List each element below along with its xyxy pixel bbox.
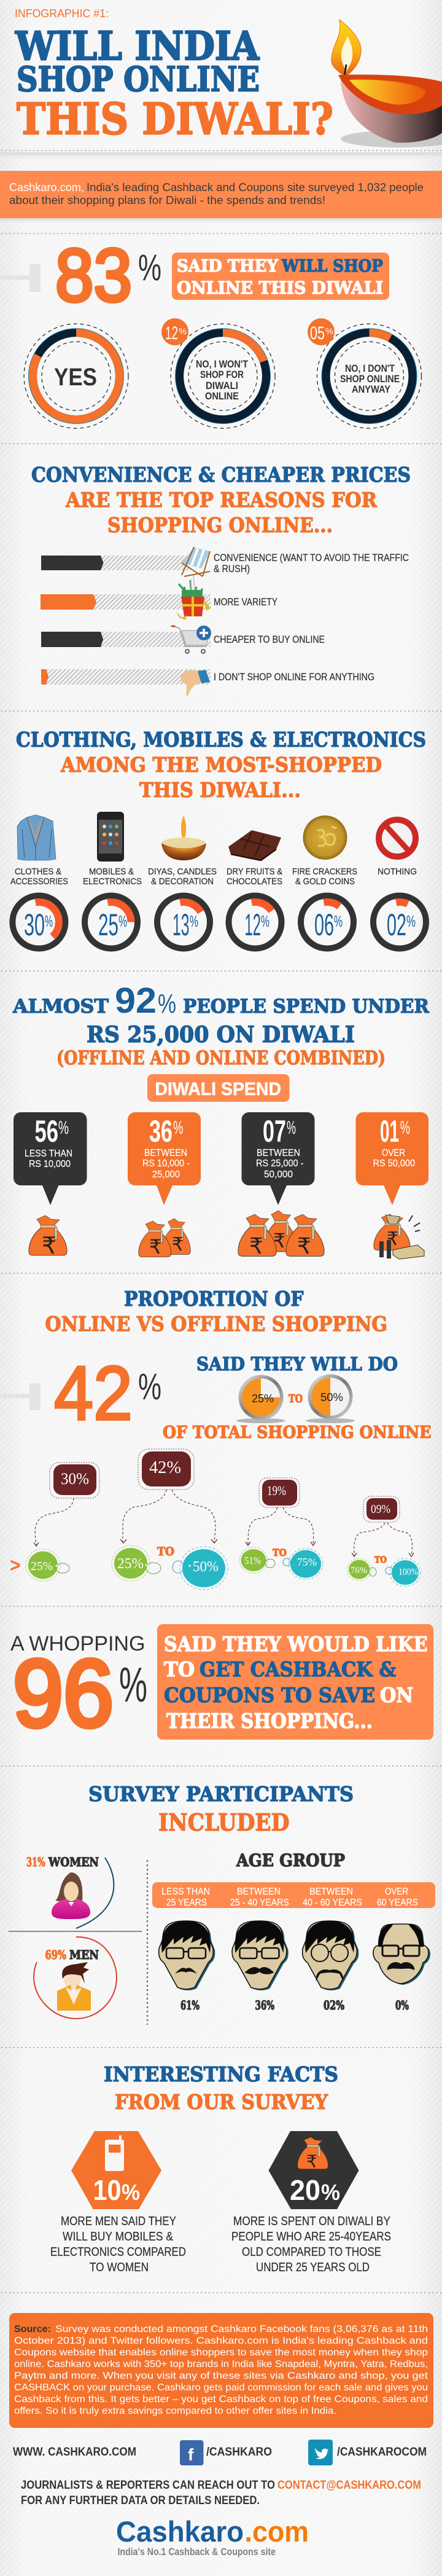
icon: diya lamp — [332, 20, 442, 147]
fact: 10 percent: ELECTRONICS COMPARED — [50, 2245, 186, 2259]
divider: gender — [9, 1931, 142, 1932]
face: under 25 61 percent: 61% — [180, 1998, 200, 2012]
icon: thumbs down — [180, 670, 210, 696]
decorative hatch marker — [0, 264, 41, 292]
icon: two money bags: ₹ — [172, 1235, 184, 1255]
panel: intro band: India's leading Cashback and Coupons site surveyed 1,032 people — [87, 181, 424, 194]
footer: facebook: f — [188, 2445, 194, 2464]
category: mobiles — [83, 812, 142, 949]
bubble: 07 percent: % — [287, 1118, 296, 1138]
bubble: 56 percent — [14, 1112, 87, 1205]
callout: will shop online: SAID THEY — [177, 257, 279, 276]
fact: 20 percent — [231, 2131, 391, 2274]
footer: logo: Cashkaro — [116, 2515, 244, 2548]
icon: one money bag: ₹ — [42, 1233, 56, 1259]
category: diyas: DIYAS, CANDLES — [148, 866, 217, 877]
ring: no, won't shop 12 percent: NO, I WON'T — [196, 358, 249, 370]
category: nothing: NOTHING — [378, 866, 417, 877]
category: nothing: 02 — [387, 908, 406, 942]
bubble: 36 percent: 36 — [149, 1114, 173, 1149]
text: of total shopping online: OF TOTAL SHOPPING ONLINE — [163, 1423, 431, 1442]
stat: 42 percent: % — [138, 1366, 161, 1407]
face: 40-60 02 percent — [303, 1921, 359, 2012]
heading: interesting facts: INTERESTING FACTS — [104, 2062, 338, 2086]
group: 09 percent: TO — [374, 1555, 387, 1565]
category: nothing: % — [406, 912, 416, 930]
bar: convenience — [41, 547, 409, 576]
heading: survey participants: INCLUDED — [158, 1808, 290, 1836]
bubble: 07 percent: 50,000 — [264, 1169, 293, 1180]
stat: whopping 96 percent: A WHOPPING — [10, 1632, 145, 1655]
ring: no, won't shop 12 percent — [161, 318, 275, 428]
icon: candle diya — [161, 815, 206, 860]
label: diwali spend — [147, 1074, 290, 1102]
panel: source: online. Cashkaro works with 350+ top brands in India like Snapdeal, Myntra, Yatra, Redbus, — [14, 2359, 428, 2370]
category: fire crackers — [292, 815, 357, 949]
bar: no online shopping: I DON'T SHOP ONLINE FOR ANYTHING — [214, 671, 374, 683]
category: mobiles: MOBILES & — [89, 866, 134, 877]
panel: intro band: Cashkaro.com, — [9, 181, 84, 194]
fact: 20 percent: MORE IS SPENT ON DIWALI BY — [233, 2215, 390, 2228]
bubble: 01 percent: OVER — [382, 1148, 405, 1158]
category: mobiles: % — [118, 912, 127, 930]
heading: age group: AGE GROUP — [236, 1850, 345, 1871]
bar: cheaper: CHEAPER TO BUY ONLINE — [214, 634, 325, 645]
bar: more variety — [41, 575, 277, 620]
bubble: 36 percent: BETWEEN — [144, 1148, 187, 1158]
category: nothing — [373, 820, 426, 949]
bubble: 01 percent — [356, 1112, 428, 1205]
main title: WILL INDIA — [15, 23, 260, 69]
icon: chocolate bar — [228, 830, 281, 860]
icon: one money bag — [29, 1215, 67, 1259]
ring: no, don't shop online 05 percent: SHOP ONLINE — [340, 373, 400, 385]
bar: cheaper — [41, 626, 325, 653]
panel: source: offers. So it is truly extra savings compared to other offer sites in India. — [14, 2406, 336, 2416]
heading: survey participants — [88, 1782, 354, 1836]
heading: online vs offline: ONLINE VS OFFLINE SHOPPING — [45, 1312, 387, 1336]
category: clothes — [10, 815, 68, 949]
ring: no, won't shop 12 percent: ONLINE — [205, 390, 239, 402]
callout: will shop online: ONLINE THIS DIWALI — [177, 278, 383, 298]
panel: age headers: OVER — [385, 1887, 408, 1897]
panel: men 69 percent — [34, 1937, 117, 2019]
gauge: 25 percent: 25% — [252, 1392, 274, 1405]
panel: women 31 percent: WOMEN — [48, 1855, 99, 1869]
text: said they will do: SAID THEY WILL DO — [196, 1354, 398, 1375]
ring: no, don't shop online 05 percent: 05 — [310, 323, 325, 344]
category: clothes: % — [45, 912, 53, 930]
main title — [15, 23, 333, 144]
footer: logo — [116, 2515, 309, 2558]
icon: three money bags — [238, 1211, 324, 1259]
footer: facebook — [180, 2440, 272, 2465]
callout: will shop online: WILL SHOP — [281, 257, 383, 276]
category: clothes: 30 — [24, 908, 45, 942]
category: dry fruits — [227, 830, 282, 949]
stat: 42 percent: 42 — [54, 1351, 133, 1436]
bubble: 07 percent: BETWEEN — [257, 1148, 300, 1158]
panel: women 31 percent — [26, 1855, 114, 1928]
ring: no, don't shop online 05 percent: ANYWAY — [352, 383, 391, 395]
main title: THIS DIWALI? — [17, 93, 333, 144]
bar: convenience: CONVENIENCE (WANT TO AVOID THE TRAFFIC — [214, 552, 409, 564]
heading: 92 percent spend: PEOPLE SPEND UNDER — [183, 995, 429, 1018]
ring: no, don't shop online 05 percent: % — [325, 326, 333, 337]
icon: three money bags: ₹ — [249, 1233, 263, 1259]
heading: 92 percent spend: ALMOST — [12, 995, 109, 1018]
icon: gift basket of crackers — [176, 575, 211, 620]
icon: money bag with cash — [374, 1214, 424, 1259]
footer: journalists contact: JOURNALISTS & REPORTERS CAN REACH OUT TO — [21, 2479, 275, 2492]
fact: 10 percent: MORE MEN SAID THEY — [61, 2215, 176, 2228]
panel: women 31 percent: 31% — [26, 1855, 45, 1869]
ring: no, won't shop 12 percent: DIWALI — [206, 380, 238, 391]
icon: prohibited sign — [379, 820, 416, 857]
group: 09 percent: 76% — [351, 1566, 367, 1576]
fact: 20 percent: PEOPLE WHO ARE 25-40YEARS — [231, 2230, 391, 2244]
category: mobiles: ELECTRONICS — [83, 876, 142, 887]
group: 30 percent to over 25: 30% — [61, 1470, 89, 1488]
heading: interesting facts: FROM OUR SURVEY — [115, 2090, 328, 2114]
group: 19 percent: 51% — [244, 1555, 261, 1566]
heading: online vs offline — [45, 1287, 387, 1336]
stat: 83 percent: 83 — [55, 234, 132, 317]
gauge: 25 percent — [236, 1375, 285, 1423]
category: fire crackers: & GOLD COINS — [295, 876, 355, 887]
icon: two money bags — [139, 1219, 190, 1258]
panel: source: Paytm and more. When you visit any of these sites via Cashkaro and shop, you get — [14, 2371, 428, 2381]
panel: age headers: 25 YEARS — [166, 1898, 207, 1908]
heading: most shopped: AMONG THE MOST-SHOPPED — [60, 753, 382, 777]
bubble: 07 percent: 07 — [263, 1114, 286, 1149]
fact: 10 percent: TO WOMEN — [90, 2261, 149, 2274]
footer: journalists contact: FOR ANY FURTHER DATA OR DETAILS NEEDED. — [21, 2494, 260, 2507]
panel: intro band: about their shopping plans for Diwali - the spends and trends! — [9, 194, 325, 206]
connectors: dashed arrows — [35, 1490, 412, 1556]
bubble: 01 percent: RS 50,000 — [373, 1158, 415, 1169]
panel: men 69 percent: 69% — [45, 1947, 66, 1962]
panel: age headers: 60 YEARS — [377, 1898, 418, 1908]
panel: age headers: 40 - 60 YEARS — [303, 1898, 362, 1908]
category: diyas: & DECORATION — [151, 876, 214, 887]
icon: shopping cart — [171, 626, 211, 653]
panel: age headers: 25 - 40 YEARS — [230, 1898, 289, 1908]
bar: more variety: MORE VARIETY — [214, 596, 277, 608]
heading: interesting facts — [104, 2062, 338, 2114]
gauge: 50 percent — [306, 1374, 355, 1423]
heading: top reasons: ARE THE TOP REASONS FOR — [65, 488, 378, 512]
group: 42 percent: 50% — [193, 1559, 219, 1575]
callout: cashback and coupons: THEIR SHOPPING... — [166, 1709, 373, 1733]
panel: men 69 percent: MEN — [69, 1947, 99, 1962]
footer: logo: .com — [244, 2515, 309, 2548]
category: fire crackers: % — [334, 912, 343, 930]
stat: 83 percent: % — [138, 247, 161, 288]
footer: twitter — [308, 2440, 427, 2465]
heading: top reasons: CONVENIENCE & CHEAPER PRICES — [31, 463, 411, 487]
category: dry fruits: CHOCOLATES — [227, 876, 282, 887]
panel: source: Source: — [14, 2324, 51, 2334]
face: over 60 0 percent — [373, 1924, 430, 2012]
panel: source: Cashback from this. It gets better – you get Cashback on top of free Coupons, sales and — [14, 2394, 428, 2405]
fact: 20 percent: % — [321, 2180, 340, 2205]
bubble: 36 percent: % — [173, 1118, 183, 1138]
icon: three money bags: ₹ — [297, 1233, 311, 1259]
heading: 92 percent spend — [12, 981, 429, 1069]
icon: mobile phone — [105, 2135, 124, 2171]
ring: no, don't shop online 05 percent — [308, 318, 421, 428]
group: 30 percent to over 25 — [10, 1463, 99, 1581]
callout: cashback and coupons: ON — [380, 1683, 413, 1707]
heading: 92 percent spend: RS 25,000 ON DIWALI — [87, 1022, 355, 1048]
text: to: TO — [289, 1392, 303, 1405]
heading: most shopped — [16, 728, 426, 802]
bubble: 36 percent — [128, 1112, 201, 1205]
heading: most shopped: THIS DIWALI... — [139, 778, 301, 802]
group: 19 percent: 75% — [297, 1556, 317, 1568]
icon: money bag — [298, 2137, 328, 2171]
bubble: 36 percent: RS 10,000 - — [142, 1158, 190, 1169]
ring: no, don't shop online 05 percent: NO, I DON'T — [345, 363, 395, 374]
panel: source — [9, 2313, 433, 2428]
group: 19 percent: TO — [273, 1547, 287, 1558]
group: 19 percent — [239, 1478, 323, 1579]
category: clothes: ACCESSORIES — [10, 876, 68, 887]
bubble: 36 percent: 25,000 — [152, 1169, 180, 1180]
category: mobiles: 25 — [98, 908, 118, 942]
group: 42 percent: 42% — [149, 1458, 181, 1477]
header: infographic label: INFOGRAPHIC #1: — [15, 7, 109, 20]
face: 25-40 36 percent — [232, 1921, 289, 2012]
face: 25-40 36 percent: 36% — [255, 1998, 274, 2012]
icon: two money bags: ₹ — [149, 1236, 161, 1258]
bubble: 01 percent: 01 — [380, 1114, 399, 1149]
panel: source: CASHBACK on your purchase. Cashkaro gets paid commission for each sale and gives you — [14, 2382, 428, 2393]
bar: convenience: & RUSH) — [214, 563, 250, 575]
bar: no online shopping — [41, 669, 374, 696]
category: clothes: CLOTHES & — [15, 866, 61, 877]
icon: gold coin — [303, 815, 347, 860]
group: 19 percent: 19% — [267, 1483, 286, 1498]
ring: no, won't shop 12 percent: 12 — [165, 323, 178, 344]
category: diyas: % — [190, 912, 198, 930]
main title: SHOP ONLINE — [17, 59, 260, 99]
heading: 92 percent spend: % — [158, 989, 176, 1019]
panel: source: Coupons website that enables online shoppers to save the most money when they shop — [14, 2347, 428, 2358]
fact: 10 percent — [50, 2131, 186, 2274]
face: over 60 0 percent: 0% — [395, 1998, 409, 2012]
panel: intro band — [0, 171, 442, 218]
fact: 10 percent: % — [122, 2180, 140, 2205]
icon: man — [57, 1962, 91, 2011]
heading: online vs offline: PROPORTION OF — [124, 1287, 303, 1311]
group: 09 percent: 100% — [398, 1567, 418, 1577]
fact: 20 percent: OLD COMPARED TO THOSE — [242, 2245, 381, 2259]
heading: 92 percent spend: 92 — [115, 981, 157, 1021]
fact: 10 percent: 10 — [93, 2174, 122, 2206]
panel: source: Survey was conducted amongst Cashkaro Facebook fans (3,06,376 as at 11th — [55, 2324, 428, 2334]
heading: top reasons: SHOPPING ONLINE... — [107, 513, 333, 537]
panel: age headers: LESS THAN — [161, 1887, 210, 1897]
heading: survey participants: SURVEY PARTICIPANTS — [88, 1782, 354, 1806]
callout: cashback and coupons: TO — [164, 1657, 195, 1681]
stat: whopping 96 percent: 96 — [13, 1640, 114, 1746]
callout: cashback and coupons: GET CASHBACK & — [200, 1657, 396, 1681]
bubble: 56 percent: % — [58, 1118, 69, 1138]
heading: top reasons — [31, 463, 411, 537]
divider: vertical dotted — [147, 1860, 148, 2025]
footer: website: WWW. CASHKARO.COM — [13, 2446, 136, 2459]
panel: age headers: BETWEEN — [309, 1887, 353, 1897]
bubble: 56 percent: 56 — [34, 1114, 58, 1149]
group: 09 percent: 09% — [371, 1502, 390, 1516]
footer: journalists contact — [21, 2479, 421, 2507]
group: 09 percent — [347, 1496, 421, 1587]
icon: three money bags: ₹ — [273, 1230, 285, 1252]
fact: 10 percent: WILL BUY MOBILES & — [63, 2230, 174, 2244]
bubble: 56 percent: LESS THAN — [25, 1149, 72, 1159]
category: diyas — [148, 815, 217, 949]
group: 30 percent to over 25: 25% — [31, 1560, 53, 1573]
icon: smartphone — [97, 812, 124, 862]
face: 40-60 02 percent: 02% — [324, 1998, 344, 2012]
icon: deck chair — [182, 547, 210, 576]
footer: logo: India's No.1 Cashback & Coupons site — [118, 2546, 276, 2558]
group: 42 percent: TO — [157, 1545, 174, 1558]
icon: money bag with cash: ₹ — [387, 1229, 398, 1249]
category: dry fruits: % — [261, 912, 269, 930]
callout: cashback and coupons: COUPONS TO SAVE — [164, 1683, 375, 1707]
category: fire crackers: 06 — [314, 908, 334, 942]
footer: twitter: /CASHKAROCOM — [337, 2446, 427, 2459]
bubble: 07 percent: RS 25,000 - — [256, 1158, 303, 1169]
panel: source: October 2013) and Twitter followers. Cashkaro.com is India's leading Cashback and — [14, 2336, 428, 2346]
decorative hatch marker — [0, 1383, 41, 1410]
ring: yes 83 percent — [24, 324, 128, 428]
fact: 20 percent: 20 — [290, 2174, 320, 2206]
face: under 25 61 percent — [159, 1921, 215, 2012]
category: diyas: 13 — [173, 908, 189, 942]
group: 30 percent to over 25: > — [10, 1554, 21, 1576]
icon: jacket — [17, 815, 56, 860]
panel: age headers: BETWEEN — [237, 1887, 281, 1897]
bubble: 56 percent: RS 10,000 — [29, 1159, 71, 1169]
fact: 20 percent: UNDER 25 YEARS OLD — [256, 2261, 370, 2274]
category: dry fruits: DRY FRUITS & — [227, 866, 282, 877]
gauge: 50 percent: 50% — [320, 1391, 343, 1404]
footer: journalists contact: CONTACT@CASHKARO.COM — [277, 2479, 421, 2492]
callout: will shop online — [172, 253, 389, 300]
icon: woman — [52, 1872, 90, 1919]
ring: no, won't shop 12 percent: % — [179, 326, 187, 337]
bubble: 01 percent: % — [400, 1118, 410, 1138]
ring: no, won't shop 12 percent: SHOP FOR — [200, 369, 244, 380]
category: dry fruits: 12 — [244, 908, 261, 942]
panel: age headers — [152, 1882, 435, 1908]
group: 42 percent: 25% — [117, 1556, 144, 1572]
group: 42 percent — [112, 1449, 228, 1590]
bubble: 07 percent — [242, 1112, 314, 1205]
ring: yes 83 percent: YES — [54, 364, 97, 391]
footer: facebook: /CASHKARO — [206, 2446, 272, 2459]
callout: cashback and coupons — [157, 1624, 433, 1740]
stat: whopping 96 percent: % — [119, 1657, 147, 1712]
icon: money bag: ₹ — [306, 2152, 317, 2171]
label: diwali spend: DIWALI SPEND — [155, 1079, 281, 1099]
category: fire crackers: FIRE CRACKERS — [292, 866, 357, 877]
